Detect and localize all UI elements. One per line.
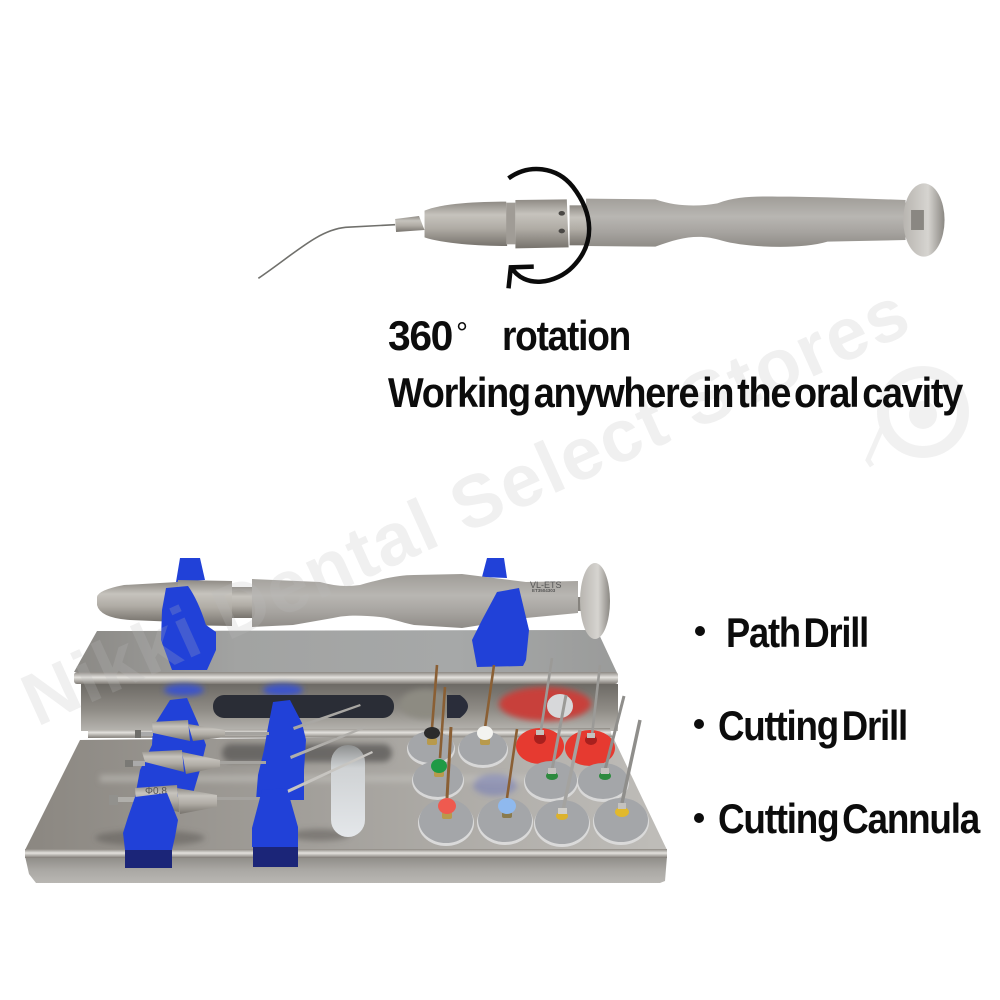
grey discs row one: [407, 731, 508, 768]
small handpiece: 0.8: Φ0.8: [145, 786, 167, 797]
heading: 360 rotation: rotation: [502, 312, 630, 359]
top handpiece with curved tip: [258, 183, 945, 278]
small handpiece: 0.8: [109, 751, 373, 814]
collars row one: [424, 726, 597, 745]
handle neck: [232, 587, 252, 618]
holders left column: [135, 698, 206, 797]
watermark logo: [868, 372, 963, 466]
white cylinder: [331, 745, 365, 837]
heading: 360 rotation: 360: [388, 312, 452, 359]
tray reflections: [164, 684, 591, 721]
heading: 360 rotation: °: [456, 317, 468, 350]
back row discs and tools: [407, 658, 615, 768]
handle body: [586, 197, 906, 247]
grey discs row two: [412, 761, 629, 802]
front grip: [425, 202, 507, 246]
icon: curved needle tip: [258, 225, 395, 278]
front row discs and tools: [418, 720, 649, 847]
rear holders upper tier: [176, 558, 507, 582]
tray lower plate: [25, 735, 667, 850]
handle front grip: [97, 582, 178, 622]
main handle: [97, 558, 610, 670]
holders middle column: [256, 700, 306, 800]
collars row three: [438, 798, 629, 820]
front holder right: [472, 588, 529, 667]
drills and needles row one: [432, 658, 600, 735]
front holder lower middle: [252, 788, 298, 867]
tray front band: [25, 849, 667, 858]
collars row two: [431, 759, 611, 780]
handle stem: [578, 597, 596, 611]
slot: [213, 694, 573, 718]
tray upper fold: [74, 672, 618, 684]
tray vertical panel: [81, 684, 618, 731]
heading: 360 rotation: [388, 312, 630, 359]
handle body: [252, 574, 578, 628]
rotation arrow: [509, 169, 589, 288]
product kit: tray with tools: [25, 558, 667, 883]
front holder lower left: [123, 793, 178, 868]
tray lower fold: [88, 728, 612, 738]
drills and needles row two: [440, 687, 624, 770]
model label: VL-ETS: [530, 580, 562, 590]
tray back plate: [74, 630, 618, 675]
handle collar: [178, 580, 232, 626]
red discs: [516, 728, 615, 766]
item: cutting drill: Cutting Drill: [718, 702, 907, 749]
drills and needles row three: [447, 720, 640, 810]
handle end disc: [580, 563, 610, 639]
front holder left: [161, 586, 216, 670]
end disc: [903, 183, 945, 257]
tray front lip: [25, 856, 667, 883]
bullet list: tools: [694, 609, 981, 842]
small handpiece: 1.1: [135, 704, 361, 741]
middle row discs and tools: [412, 687, 629, 802]
model label: ET3504303: [532, 588, 556, 593]
knurled collar: [506, 199, 586, 248]
watermark: Nikki Dental Select Stores: [9, 270, 920, 742]
grey discs row three: [418, 798, 649, 847]
nose cone: [395, 216, 425, 232]
lower plate reflections: [95, 744, 625, 846]
item: path drill: Path Drill: [726, 609, 868, 656]
small handpiece: 0.9: [125, 726, 366, 774]
